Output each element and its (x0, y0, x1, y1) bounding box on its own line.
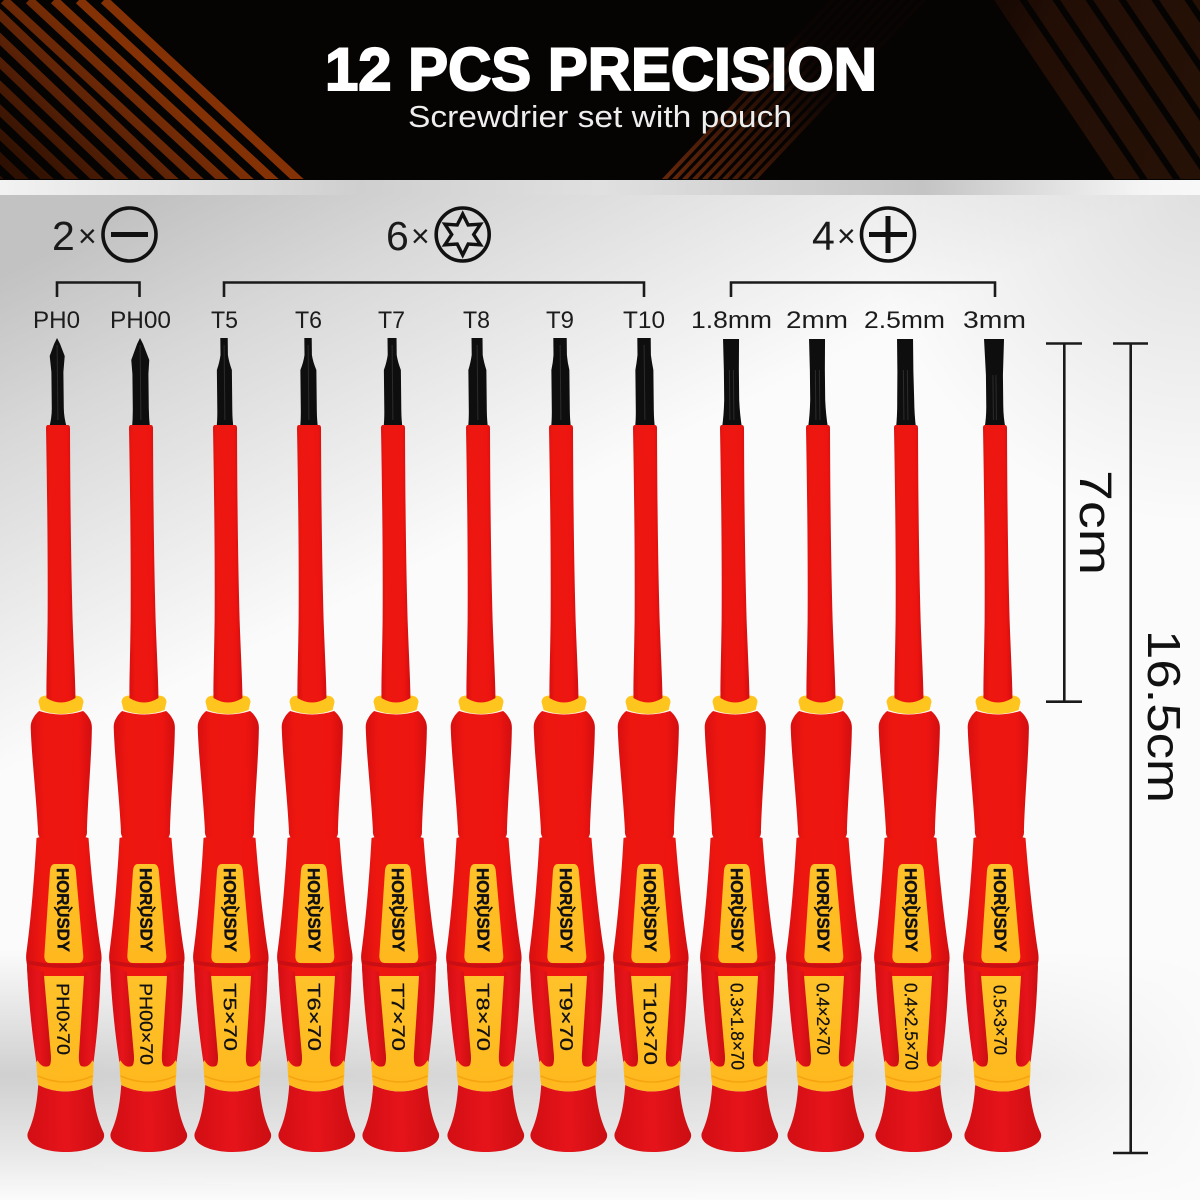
group heading: 2x slotted: 2 (52, 213, 75, 259)
bracket: slotted group (731, 282, 995, 297)
screwdriver: T7 (354, 338, 439, 1152)
screwdriver: T5: T5×70 (220, 983, 240, 1051)
size labels row: 2mm (786, 307, 848, 334)
screwdriver: T9: T9×70 (556, 983, 576, 1051)
dimension: 16.5cm: 16.5cm (1138, 630, 1190, 803)
size labels row: T5 (211, 307, 238, 334)
screwdriver: 3mm (956, 339, 1041, 1152)
screwdriver: PH0: PH0×70 (53, 983, 73, 1055)
screwdriver: T7: HORUSDY (388, 868, 408, 953)
screwdriver: T10: T10×70 (640, 983, 661, 1065)
size labels row: T8 (463, 307, 490, 334)
screwdriver: PH00: HORUSDY (136, 868, 156, 953)
screwdriver: T7: T7×70 (388, 983, 408, 1051)
group heading: 4x phillips: × (837, 218, 856, 254)
title: 12 PCS PRECISION (325, 36, 877, 103)
group heading: 2x slotted (52, 208, 156, 261)
header banner (0, 0, 1200, 189)
screwdriver: PH00 (102, 338, 187, 1152)
screwdriver: T8 (439, 338, 524, 1152)
top right background shade (850, 195, 1200, 535)
bracket: T group (224, 282, 644, 297)
screwdriver: T8: T8×70 (473, 983, 493, 1051)
screwdriver: PH0: HORUSDY (53, 868, 73, 953)
size labels row (33, 307, 1026, 334)
screwdriver: T10: HORUSDY (640, 868, 660, 953)
screwdriver: PH0 (19, 338, 104, 1152)
size labels row: 3mm (963, 307, 1026, 334)
group heading: 6x torx (386, 208, 489, 261)
size labels row: T7 (378, 307, 405, 334)
screwdriver: T5 (186, 338, 271, 1152)
size labels row: 1.8mm (691, 307, 772, 334)
dimension: 7cm (1046, 344, 1121, 702)
light strip under header (0, 180, 1200, 195)
screwdriver: T6 (270, 338, 355, 1152)
screwdriver: 1.8mm: 0.3×1.8×70 (727, 983, 748, 1070)
screwdriver: T9 (522, 338, 607, 1152)
group heading: 4x phillips: 4 (812, 213, 835, 259)
screwdriver: T6: HORUSDY (304, 868, 324, 953)
bracket: PH group (57, 282, 140, 297)
screwdriver: T5: HORUSDY (220, 868, 240, 953)
screwdriver: 3mm: HORUSDY (990, 868, 1010, 953)
size labels row: T10 (623, 307, 665, 334)
group heading: 6x torx: × (411, 218, 430, 254)
screwdriver: PH00: PH00×70 (136, 983, 157, 1065)
size labels row: 2.5mm (864, 307, 945, 334)
dimension: 16.5cm (1113, 344, 1190, 1153)
group heading: 4x phillips (812, 208, 914, 261)
size labels row: PH00 (110, 307, 171, 334)
screwdriver: 2mm: 0.4×2×70 (813, 983, 833, 1055)
screwdriver: 2mm (779, 339, 864, 1152)
group heading: 2x slotted: × (78, 218, 97, 254)
lower grey reflection band (0, 974, 1118, 1179)
screwdriver: T10 (606, 338, 691, 1152)
size labels row: PH0 (33, 307, 80, 334)
screwdriver: 2.5mm (867, 339, 952, 1152)
size labels row: T9 (546, 307, 574, 334)
screwdriver: 3mm: 0.5×3×70 (990, 985, 1010, 1055)
screwdriver: 2.5mm: 0.4×2.5×70 (901, 983, 922, 1070)
screwdriver: T6: T6×70 (304, 983, 324, 1051)
screwdriver: 2mm: HORUSDY (813, 868, 833, 953)
group heading: 6x torx: 6 (386, 213, 409, 259)
screwdriver: 1.8mm: HORUSDY (727, 868, 747, 953)
size labels row: T6 (295, 307, 322, 334)
subtitle: Screwdrier set with pouch (408, 99, 792, 134)
dimension: 7cm: 7cm (1070, 470, 1121, 575)
screwdriver: 2.5mm: HORUSDY (901, 868, 921, 953)
screwdriver: 1.8mm (693, 339, 778, 1152)
screwdriver: T9: HORUSDY (556, 868, 576, 953)
screwdriver: T8: HORUSDY (473, 868, 493, 953)
